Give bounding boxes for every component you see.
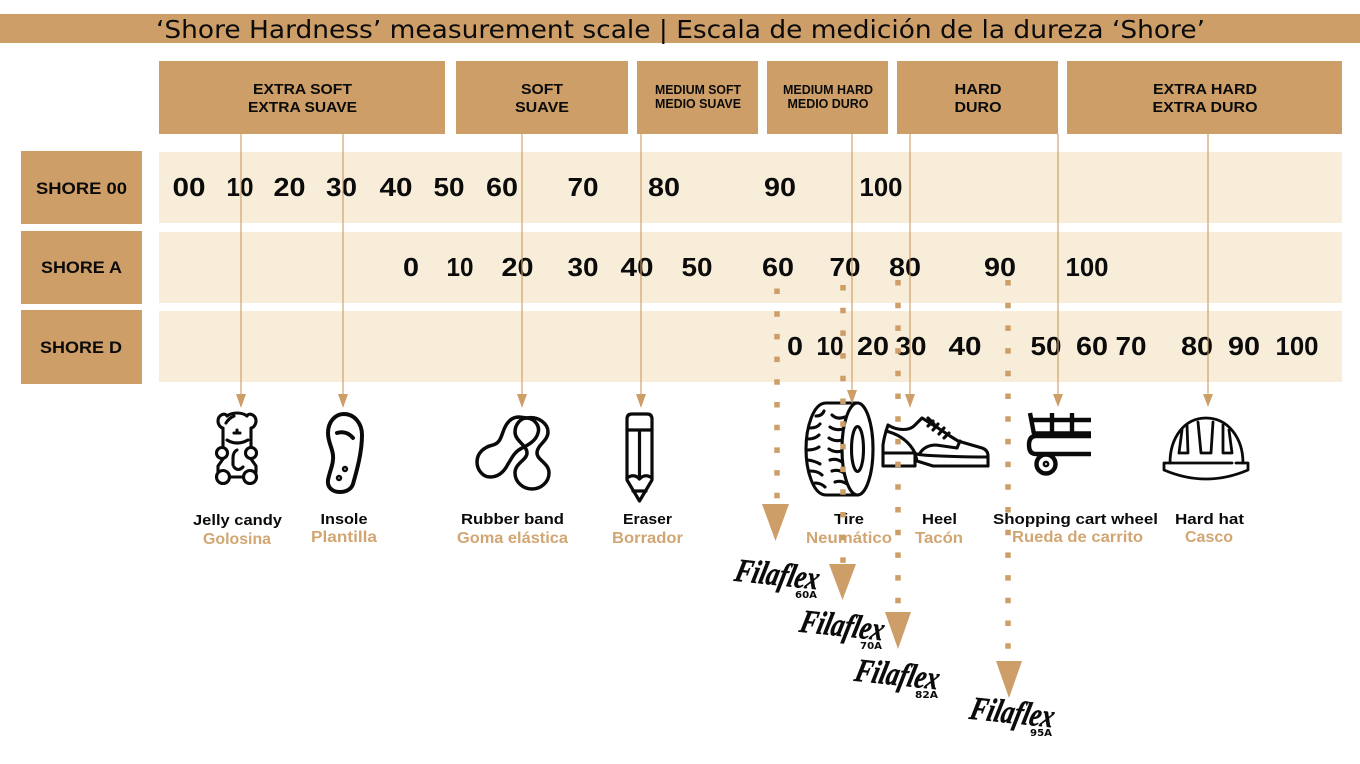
label: shopping cart wheel — [993, 511, 1158, 546]
header: medium soft: MEDIUM SOFT — [655, 83, 741, 97]
logo: Filaflex 70A: 70A — [860, 641, 883, 652]
row: Shore A scale: SHORE A — [41, 258, 122, 277]
label: jelly candy — [193, 512, 283, 548]
row: Shore D scale: 40 — [948, 331, 982, 361]
row: Shore 00 scale: 90 — [764, 172, 796, 202]
row: Shore D scale: 0 — [787, 331, 803, 361]
label: tire — [806, 511, 892, 547]
row: Shore D scale: 80 — [1181, 331, 1213, 361]
header: extra soft: EXTRA SUAVE — [248, 99, 357, 116]
row: Shore D scale — [21, 310, 1342, 384]
label: rubber band: Rubber band — [461, 511, 564, 528]
label: heel — [915, 511, 963, 547]
header: medium soft — [637, 61, 758, 134]
label: shopping cart wheel: Shopping cart wheel — [993, 511, 1158, 528]
label: rubber band: Goma elástica — [457, 530, 568, 547]
item labels — [193, 511, 1244, 548]
label: hard hat — [1175, 511, 1244, 546]
row: Shore A scale: 90 — [984, 252, 1016, 282]
row: Shore 00 scale: 70 — [568, 172, 598, 202]
logo: Filaflex 60A: 60A — [795, 590, 818, 601]
header: medium hard: MEDIUM HARD — [783, 83, 873, 97]
arrows: category to item — [236, 134, 1213, 408]
header: medium soft: MEDIO SUAVE — [655, 97, 741, 111]
row: Shore D scale: 90 — [1228, 331, 1260, 361]
header: extra soft: EXTRA SOFT — [253, 81, 352, 98]
icon: shopping cart wheel — [1029, 413, 1091, 474]
icon: hard hat — [1164, 418, 1248, 479]
icon: pencil eraser — [627, 414, 652, 501]
header: soft: SUAVE — [515, 99, 569, 116]
arrow: Filaflex 60A dotted — [762, 288, 789, 541]
label: shopping cart wheel: Rueda de carrito — [1012, 529, 1143, 546]
row: Shore D scale: 30 — [896, 331, 926, 361]
label: heel: Heel — [922, 511, 957, 528]
row: Shore A scale: 40 — [620, 252, 654, 282]
row: Shore D scale: SHORE D — [40, 338, 122, 357]
label: hard hat: Casco — [1185, 529, 1233, 546]
icon: tire — [806, 403, 873, 495]
row: Shore A scale: 20 — [502, 252, 534, 282]
row: Shore 00 scale: 80 — [648, 172, 680, 202]
row: Shore D scale: 60 — [1076, 331, 1108, 361]
label: eraser — [612, 511, 683, 547]
header: extra hard: EXTRA DURO — [1152, 99, 1258, 116]
label: jelly candy: Jelly candy — [193, 512, 283, 529]
row: Shore D scale: 10 — [816, 331, 844, 361]
row: Shore 00 scale: 40 — [380, 172, 412, 202]
row: Shore 00 scale: 10 — [226, 172, 254, 202]
label: insole: Plantilla — [311, 529, 377, 546]
label: eraser: Eraser — [623, 511, 672, 528]
label: insole: Insole — [320, 511, 368, 528]
logo: Filaflex 95A: Filaflex — [966, 690, 1059, 735]
label: tire: Neumático — [806, 530, 892, 547]
label: heel: Tacón — [915, 530, 963, 547]
logo: Filaflex 82A: 82A — [915, 690, 939, 701]
logo: Filaflex 95A: 95A — [1030, 728, 1053, 739]
row: Shore A scale: 30 — [568, 252, 598, 282]
logo: Filaflex 82A: Filaflex — [851, 652, 944, 697]
header: extra soft — [159, 61, 445, 134]
row: Shore A scale: 10 — [446, 252, 474, 282]
hardness category headers — [159, 61, 1342, 134]
label: eraser: Borrador — [612, 530, 683, 547]
logo: Filaflex 70A: Filaflex — [796, 603, 889, 648]
row: Shore A scale — [21, 231, 1342, 304]
row: Shore D scale: 70 — [1116, 331, 1146, 361]
label: hard hat: Hard hat — [1175, 511, 1244, 528]
row: Shore 00 scale: 20 — [274, 172, 306, 202]
row: Shore A scale: 0 — [403, 252, 419, 282]
icon: jelly candy bear — [216, 413, 256, 484]
row: Shore A scale: 50 — [682, 252, 712, 282]
label: tire: Tire — [834, 511, 864, 528]
row: Shore A scale: 100 — [1066, 252, 1108, 282]
header: medium hard — [767, 61, 888, 134]
label: jelly candy: Golosina — [203, 531, 271, 548]
label: insole — [311, 511, 377, 546]
row: Shore 00 scale: 100 — [860, 172, 902, 202]
icon: shoe with heel — [883, 418, 988, 466]
logo: Filaflex 60A: Filaflex — [731, 552, 824, 597]
header: hard: HARD — [954, 81, 1002, 98]
row: Shore D scale: 100 — [1276, 331, 1318, 361]
header: extra hard — [1067, 61, 1342, 134]
header: soft: SOFT — [521, 81, 563, 98]
header: soft — [456, 61, 628, 134]
row: Shore A scale: 80 — [889, 252, 921, 282]
row: Shore D scale: 20 — [857, 331, 889, 361]
icon: insole — [328, 414, 362, 492]
icon: rubber band — [477, 417, 549, 489]
row: Shore A scale: 60 — [762, 252, 794, 282]
row: Shore D scale: 50 — [1030, 331, 1062, 361]
row: Shore 00 scale: 60 — [486, 172, 518, 202]
row: Shore 00 scale: 30 — [326, 172, 357, 202]
row: Shore 00 scale: SHORE 00 — [36, 179, 127, 198]
arrow: Filaflex 95A dotted — [996, 280, 1022, 698]
arrow: Filaflex 70A dotted — [829, 285, 856, 600]
header: extra hard: EXTRA HARD — [1153, 81, 1257, 98]
header: medium hard: MEDIO DURO — [788, 97, 869, 111]
arrow: Filaflex 82A dotted — [885, 280, 911, 649]
row: Shore A scale: 70 — [830, 252, 860, 282]
title: ‘Shore Hardness’ measurement scale | Escala de medición de la dureza ‘Shore’ — [156, 15, 1205, 44]
row: Shore 00 scale — [21, 151, 1342, 224]
header: hard — [897, 61, 1058, 134]
row: Shore 00 scale: 50 — [434, 172, 464, 202]
header: hard: DURO — [954, 99, 1002, 116]
label: rubber band — [457, 511, 568, 547]
row: Shore 00 scale: 00 — [172, 172, 206, 202]
